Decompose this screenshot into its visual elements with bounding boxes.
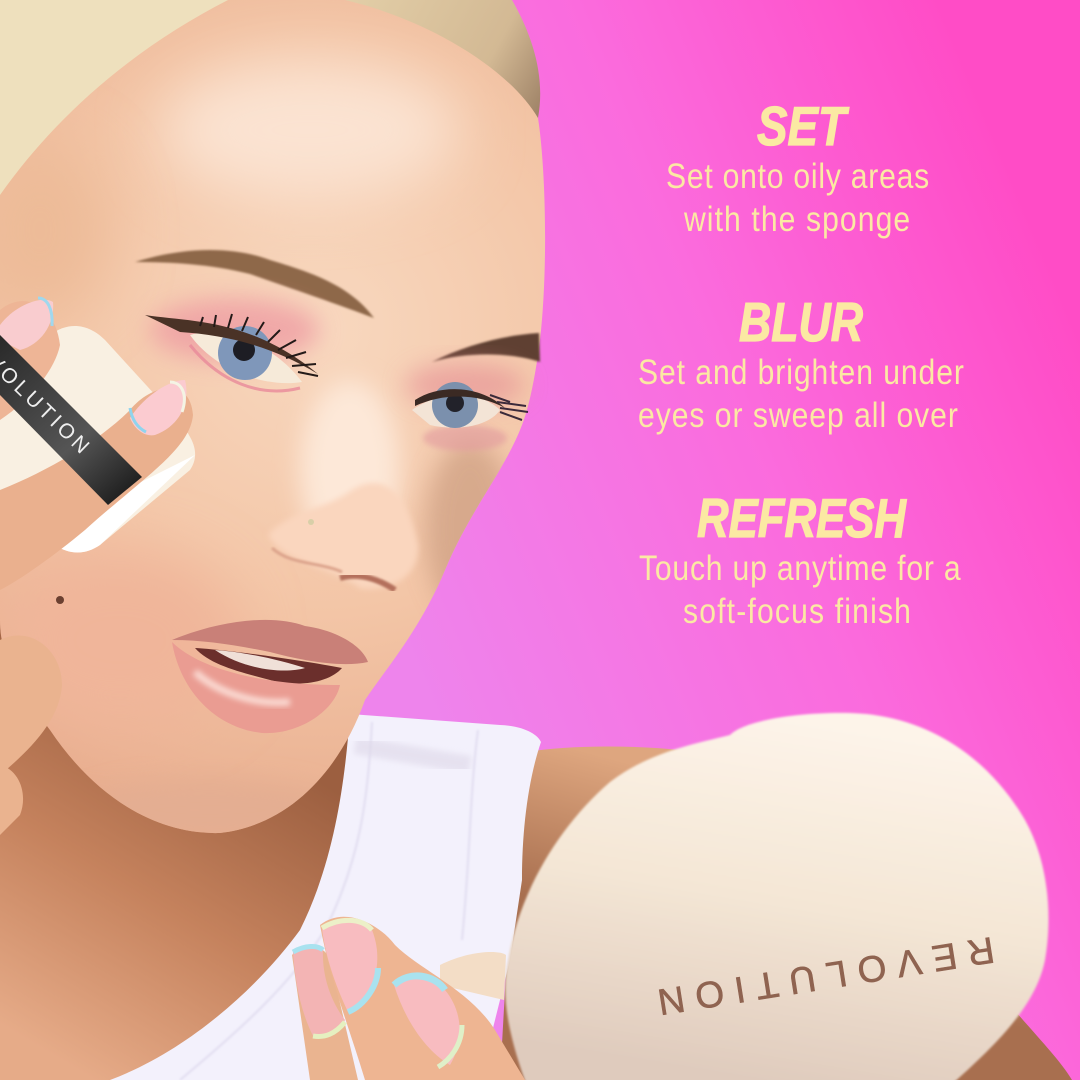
- branded ribbon: [0, 335, 142, 505]
- nose: [268, 483, 418, 589]
- compact logo: REVOLUTION: [655, 929, 997, 1023]
- step: BLUR: [638, 291, 964, 435]
- description: SET: with the sponge: [683, 199, 910, 239]
- step: SET: [666, 95, 929, 239]
- description: BLUR: [638, 352, 964, 435]
- face: [0, 0, 545, 840]
- powder compact: [505, 713, 1048, 1080]
- lower left fingers: [0, 636, 62, 835]
- heading: BLUR: BLUR: [739, 291, 863, 353]
- right eyebrow: [432, 333, 540, 362]
- lower fingernail: [130, 380, 186, 435]
- sponge: [0, 326, 195, 552]
- description: BLUR: eyes or sweep all over: [638, 395, 958, 435]
- nail 3: [394, 976, 460, 1065]
- beauty spot: [56, 596, 64, 604]
- upper fingernail: [0, 300, 53, 350]
- step: REFRESH: [639, 487, 961, 631]
- left eyebrow: [135, 250, 374, 318]
- blonde hair: right: [345, 0, 540, 118]
- description: REFRESH: [639, 548, 961, 631]
- nail 1: [293, 946, 345, 1038]
- right eye: [405, 363, 528, 451]
- description: REFRESH: Touch up anytime for a: [639, 548, 961, 588]
- lips: [172, 620, 368, 733]
- lower finger: [0, 388, 193, 590]
- description: REFRESH: soft-focus finish: [683, 591, 911, 631]
- neck and chest: [0, 600, 420, 1080]
- text block: steps: [638, 95, 964, 631]
- white tank top: [110, 714, 541, 1080]
- hand holding sponge: [0, 298, 195, 590]
- upper finger: [0, 301, 60, 420]
- description: SET: [666, 156, 929, 239]
- hand holding compact: [292, 917, 525, 1080]
- left eye: [145, 298, 320, 391]
- nose stud: [308, 519, 314, 525]
- description: BLUR: Set and brighten under: [638, 352, 964, 392]
- nail 2: [322, 920, 377, 1012]
- blonde hair: left: [0, 0, 228, 195]
- heading: REFRESH: REFRESH: [697, 487, 907, 549]
- shoulder and arm: [500, 746, 1072, 1080]
- description: SET: Set onto oily areas: [666, 156, 929, 196]
- heading: SET: SET: [757, 95, 850, 157]
